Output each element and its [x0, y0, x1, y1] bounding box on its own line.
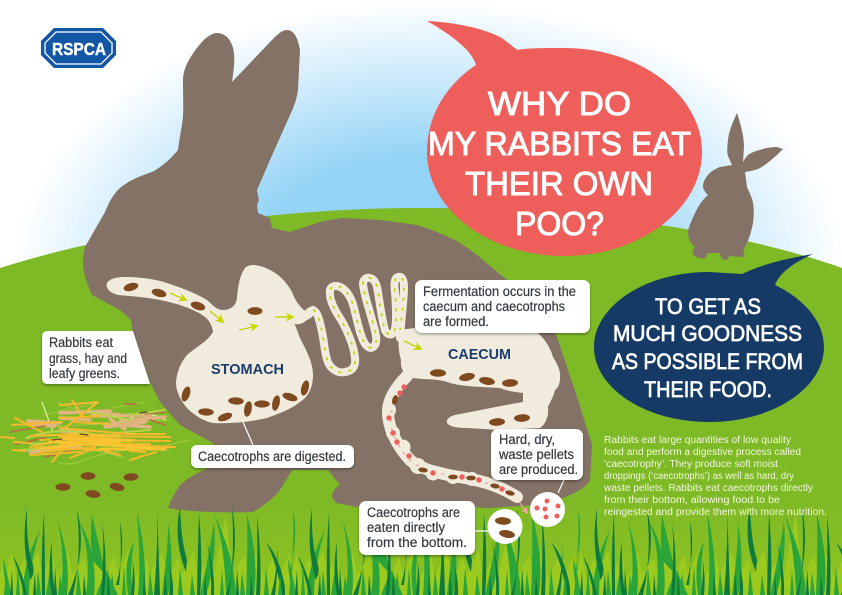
label: food: grass, hay and	[49, 351, 127, 366]
label: food: leafy greens.	[49, 366, 120, 381]
stomach heading: STOMACH	[211, 361, 284, 378]
caecum heading: CAECUM	[448, 346, 511, 363]
title	[428, 85, 691, 242]
explanatory paragraph: ‘caecotrophy’. They produce soft moist	[604, 459, 778, 470]
speech bubble: answer	[594, 254, 824, 422]
answer text: THEIR FOOD.	[644, 377, 772, 402]
explanatory paragraph: reingested and provide them with more nutrition.	[604, 507, 827, 518]
rabbit silhouette	[83, 30, 592, 512]
rectum	[382, 376, 517, 497]
title: MY RABBITS EAT	[428, 125, 691, 162]
label: digested: Caecotrophs are digested.	[198, 449, 346, 464]
answer text: MUCH GOODNESS	[613, 321, 802, 346]
label: eaten directly: from the bottom.	[367, 535, 467, 550]
intestine flow markers	[313, 277, 404, 372]
waste pellets circle	[530, 492, 565, 527]
speech bubble: question	[427, 21, 702, 256]
small intestine	[296, 277, 404, 372]
label: fermentation	[415, 280, 590, 333]
label: waste pellets: waste pellets	[498, 447, 574, 462]
caecum	[398, 328, 560, 430]
explanatory paragraph: from their bottom, allowing food to be	[604, 495, 780, 506]
pink arrow to pellets	[520, 503, 527, 513]
title: POO?	[515, 205, 604, 242]
hay pile	[1, 400, 190, 464]
label: eaten directly	[359, 501, 475, 555]
answer text: TO GET AS	[655, 294, 761, 319]
label: waste pellets: are produced.	[499, 462, 578, 477]
green hill	[0, 208, 842, 595]
label: eaten directly: Caecotrophs are	[367, 505, 460, 520]
label: food: Rabbits eat	[49, 335, 113, 350]
explanatory paragraph	[603, 435, 827, 518]
caecotroph pellets	[123, 281, 530, 497]
ground droppings	[56, 472, 139, 499]
RSPCA logo: RSPCA	[52, 39, 106, 59]
red waste dots	[386, 384, 505, 492]
label: food	[42, 331, 150, 384]
flow arrows	[170, 293, 421, 349]
label: fermentation: Fermentation occurs in the	[423, 284, 576, 299]
label: eaten directly: eaten directly	[367, 520, 445, 535]
label: waste pellets	[491, 429, 583, 480]
label: fermentation: are formed.	[423, 314, 489, 329]
grass foreground	[0, 507, 842, 595]
label: digested	[191, 445, 354, 468]
explanatory paragraph: waste pellets. Rabbits eat caecotrophs directly	[603, 483, 813, 494]
title: WHY DO	[488, 85, 631, 122]
explanatory paragraph: Rabbits eat large quantities of low quality	[604, 435, 791, 446]
digestive system	[107, 265, 560, 497]
small rabbit silhouette	[688, 113, 783, 260]
ground shading	[0, 500, 842, 595]
connector lines	[243, 422, 564, 531]
answer text: AS POSSIBLE FROM	[612, 349, 803, 374]
label: waste pellets: Hard, dry,	[499, 432, 555, 447]
answer text	[612, 294, 803, 402]
oesophagus and stomach	[107, 265, 316, 423]
label: fermentation: caecum and caecotrophs	[423, 299, 565, 314]
title: THEIR OWN	[465, 165, 653, 202]
explanatory paragraph: food and perform a digestive process called	[604, 447, 801, 458]
RSPCA logo	[41, 28, 116, 68]
caecotrophs circle	[488, 509, 522, 544]
explanatory paragraph: droppings (‘caecotrophs’) as well as hard, dry	[604, 471, 794, 482]
rectum flow markers	[391, 394, 500, 488]
